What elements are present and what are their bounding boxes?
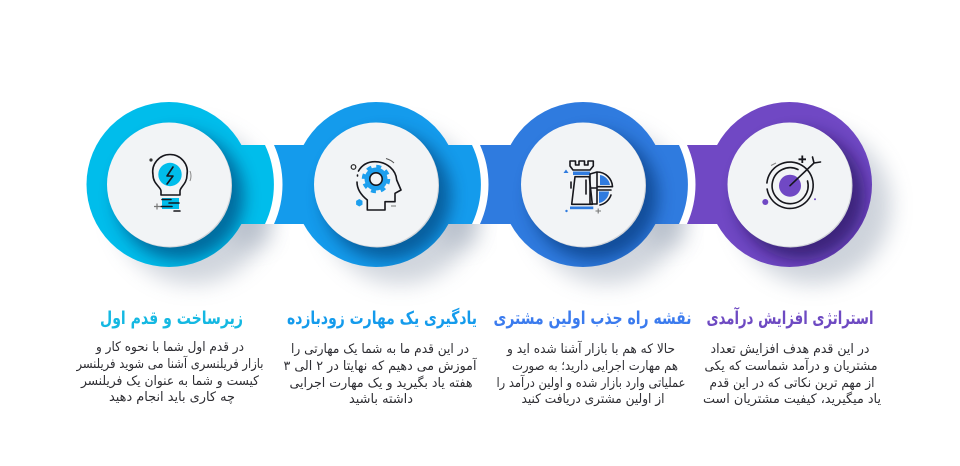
body text 3: عملیاتی وارد بازار شده و اولین درآمد را [496, 374, 686, 391]
heading 3: نقشه راه جذب اولین مشتری [494, 308, 692, 329]
body text 4: از مهم ترین نکاتی که در این قدم [710, 376, 874, 391]
step 2 graphic: fast skill learning [274, 102, 497, 284]
body text 1: چه کاری باید انجام دهید [109, 390, 235, 405]
infographic canvas [76, 102, 900, 406]
body text 4: مشتریان و درآمد شماست که یکی [704, 357, 878, 374]
body text 4: در این قدم هدف افزایش تعداد [710, 342, 870, 357]
body text 1: در قدم اول شما با نحوه کار و [95, 340, 244, 355]
icon: target with arrow [762, 156, 820, 208]
body text 3: حالا که هم با بازار آشنا شده اید و [506, 340, 675, 357]
body text 3: هم مهارت اجرایی دارید؛ به صورت [512, 359, 678, 374]
body text 1: کیست و شما به عنوان یک فریلنسر [80, 374, 260, 389]
body text 4: یاد میگیرید، کیفیت مشتریان است [703, 391, 881, 407]
text column 3 [494, 308, 692, 407]
body text 2: هفته یاد بگیرید و یک مهارت اجرایی [290, 375, 473, 391]
body text 2 [283, 342, 478, 407]
body text 1: بازار فریلنسری آشنا می شوید فریلنسر [76, 355, 264, 372]
text column 2 [283, 307, 478, 407]
icon: head with gear [351, 158, 401, 210]
text column 4 [703, 306, 881, 407]
step 1 graphic: foundation [86, 102, 290, 284]
icon: chess rook and pie chart [564, 161, 612, 214]
body text 3 [496, 340, 686, 407]
heading 4: استراتژی افزایش درآمدی [706, 306, 874, 329]
body text 4 [703, 342, 881, 407]
text column 1 [76, 308, 264, 405]
body text 1 [76, 340, 264, 405]
body text 2: داشته باشید [349, 392, 413, 407]
step 3 graphic: first customer roadmap [480, 102, 704, 284]
body text 2: در این قدم ما به شما یک مهارتی را [291, 342, 469, 357]
body text 2: آموزش می دهیم که نهایتا در ۲ الی ۳ [283, 357, 478, 374]
icon: light bulb [149, 154, 191, 211]
step 4 graphic: revenue strategy [687, 102, 891, 284]
heading 2: یادگیری یک مهارت زودبازده [287, 307, 477, 329]
body text 3: از اولین مشتری دریافت کنید [522, 392, 664, 407]
heading 1: زیرساخت و قدم اول [100, 308, 243, 329]
